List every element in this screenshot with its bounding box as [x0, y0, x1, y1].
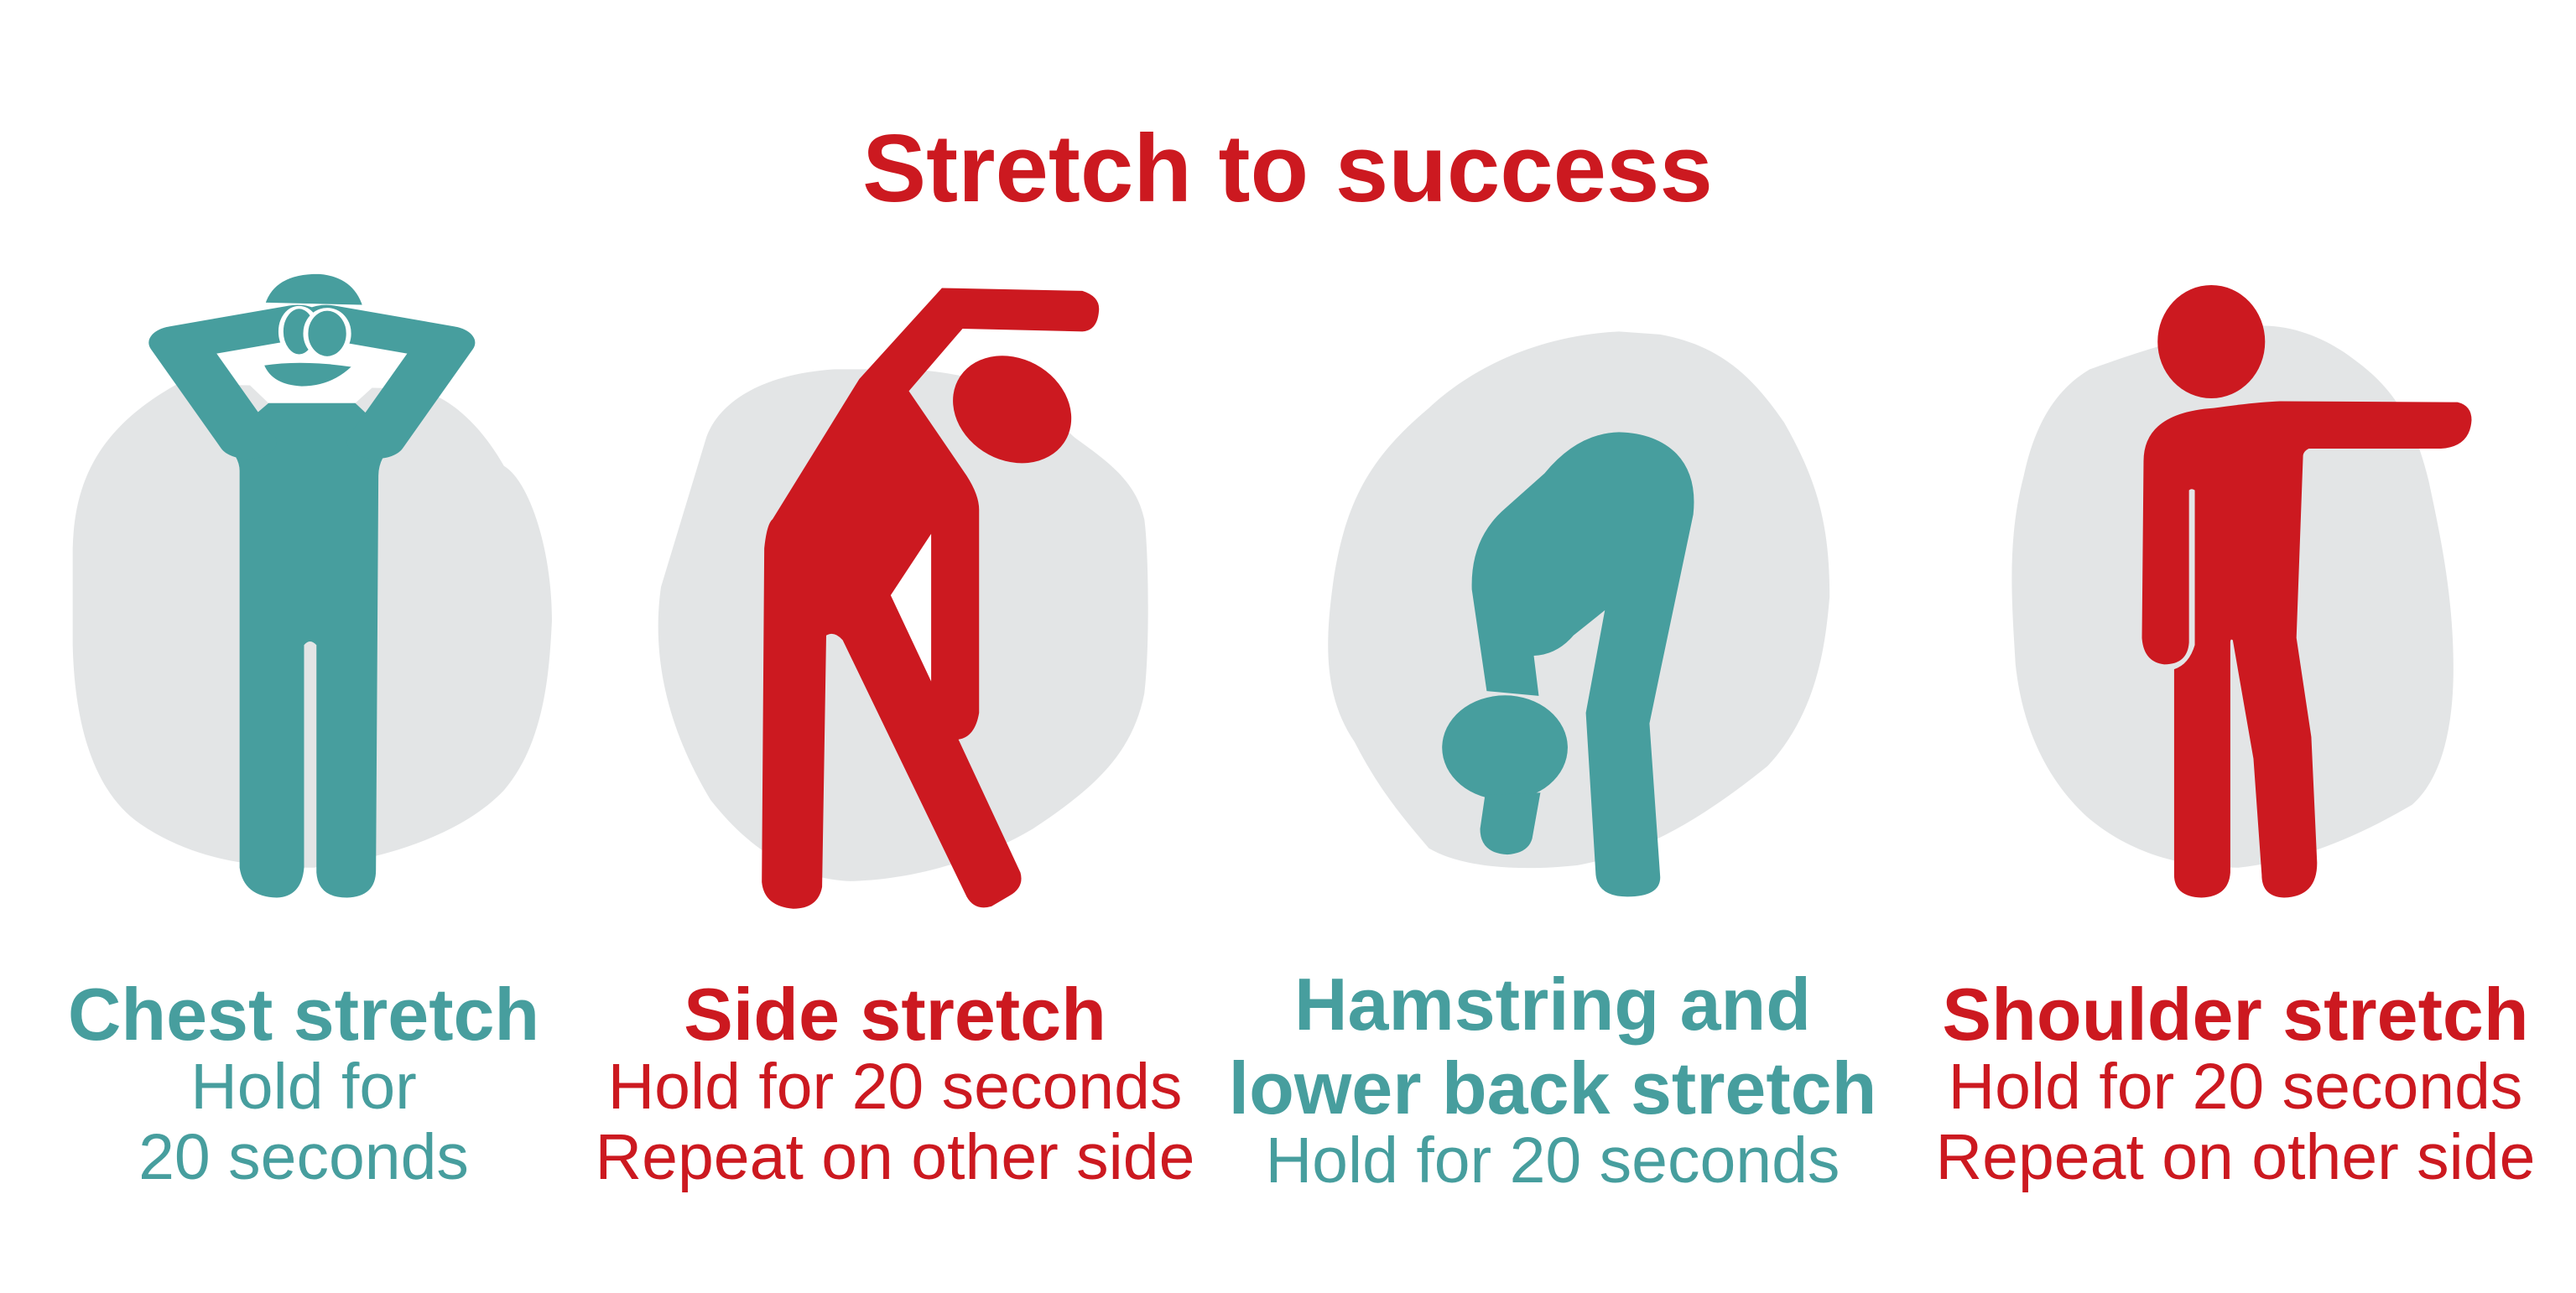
label: chest stretch	[68, 973, 539, 1193]
label: chest stretch: Chest stretch	[68, 973, 539, 1056]
title: Stretch to success	[862, 116, 1713, 222]
blob: chest	[73, 384, 552, 868]
label: shoulder stretch: Repeat on other side	[1936, 1121, 2535, 1193]
label: hamstring stretch: Hamstring and	[1294, 963, 1811, 1046]
label: side stretch	[596, 973, 1194, 1193]
blob: hamstring	[1328, 331, 1829, 868]
figure: shoulder stretch	[2011, 285, 2472, 897]
figure: chest stretch	[73, 273, 552, 897]
figure: hamstring stretch	[1328, 331, 1829, 896]
label: hamstring stretch	[1229, 963, 1876, 1197]
blob: side	[658, 369, 1148, 881]
label: side stretch: Side stretch	[684, 973, 1106, 1056]
label: side stretch: Hold for 20 seconds	[608, 1051, 1182, 1123]
figure: side stretch	[658, 288, 1148, 909]
label: shoulder stretch: Hold for 20 seconds	[1949, 1051, 2522, 1123]
label: shoulder stretch: Shoulder stretch	[1942, 973, 2529, 1056]
blob: shoulder	[2011, 325, 2454, 868]
label: shoulder stretch	[1936, 973, 2535, 1193]
label: chest stretch: Hold for	[190, 1051, 417, 1123]
label: hamstring stretch: Hold for 20 seconds	[1266, 1124, 1840, 1197]
label: side stretch: Repeat on other side	[596, 1121, 1194, 1193]
label: hamstring stretch: lower back stretch	[1229, 1046, 1876, 1129]
label: chest stretch: 20 seconds	[138, 1121, 469, 1193]
